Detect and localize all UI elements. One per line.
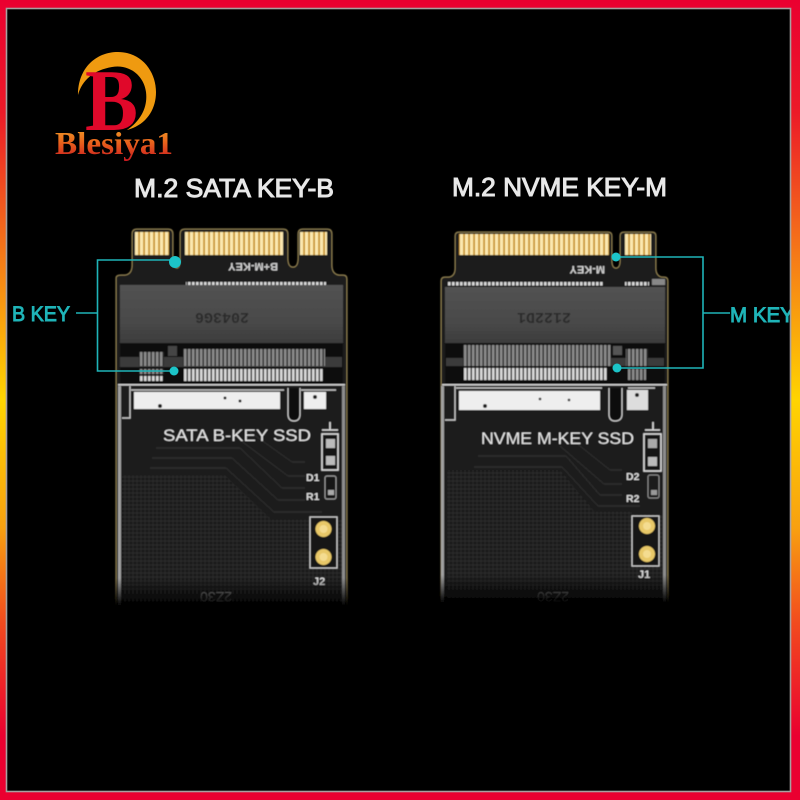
gold fingers: B key <box>135 232 327 255</box>
header pads: J2 <box>310 517 337 588</box>
panel: SATA B-key SSD board <box>110 229 355 617</box>
logo: Blesiya1 <box>55 52 173 161</box>
components: D2 R2: R2 <box>626 493 640 505</box>
panel: NVME M-key SSD board <box>435 232 675 616</box>
silkscreen: M-KEY: M-KEY <box>569 263 605 275</box>
PCB mesh and traces: M key <box>441 386 666 612</box>
silkscreen: NVME M-KEY SSD: NVME M-KEY SSD <box>481 429 634 448</box>
header pads: J1 <box>632 516 659 581</box>
label strip: M key <box>459 388 648 421</box>
heading: M.2 SATA KEY-B: M.2 SATA KEY-B <box>134 173 334 203</box>
bottom fade: B key <box>110 578 355 606</box>
connector: B key socket: 2043G6 <box>195 308 249 325</box>
connector: M key socket: 2122D1 <box>517 308 571 325</box>
silkscreen: 2230: 2Z30 <box>537 589 569 605</box>
header pads: J2: J2 <box>313 576 325 588</box>
components: D2 R2 <box>626 422 661 505</box>
connector: B key socket <box>118 281 345 386</box>
logo: Blesiya1: B <box>85 53 138 150</box>
callout: B KEY: B KEY <box>12 303 70 326</box>
callout: M KEY: M KEY <box>730 304 794 327</box>
PCB mesh and traces: B key <box>118 386 345 612</box>
label strip: B key <box>134 388 326 421</box>
silkscreen: SATA B-KEY SSD: SATA B-KEY SSD <box>163 426 311 445</box>
header pads: J1: J1 <box>638 569 650 581</box>
components: D1 R1 <box>306 422 338 503</box>
gold fingers: M key <box>459 234 651 255</box>
heading: M.2 NVME KEY-M: M.2 NVME KEY-M <box>452 172 667 202</box>
bottom fade: M key <box>435 575 675 603</box>
silkscreen: B+M-KEY: B+M-KEY <box>228 260 278 272</box>
silkscreen: 2230: 2Z30 <box>200 589 232 605</box>
callout: B KEY <box>12 256 181 376</box>
components: D1 R1: D1 <box>306 472 320 484</box>
components: D1 R1: R1 <box>306 491 320 503</box>
components: D2 R2: D2 <box>626 471 640 483</box>
callout: M KEY <box>612 252 794 372</box>
logo: Blesiya1: Blesiya1 <box>55 125 173 161</box>
connector: M key socket <box>442 279 667 386</box>
